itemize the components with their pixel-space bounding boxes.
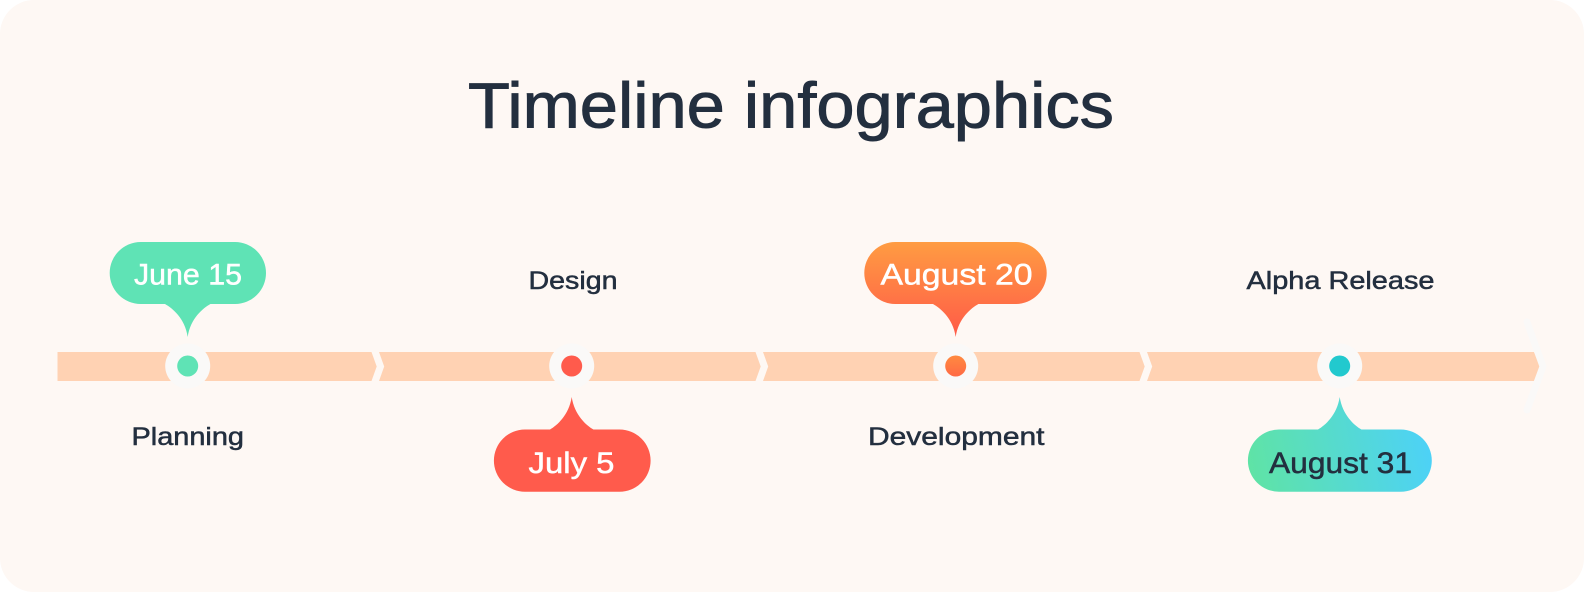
label: Planning: Planning bbox=[132, 423, 244, 451]
label: Development: Development bbox=[868, 423, 1045, 451]
marker bbox=[1317, 344, 1362, 388]
label: Design: Design bbox=[528, 267, 618, 295]
date: August 31: August 31 bbox=[1269, 447, 1412, 480]
bubble: July 5 bbox=[494, 397, 651, 492]
marker bbox=[165, 344, 210, 388]
date: August 20: August 20 bbox=[880, 258, 1032, 292]
segment 3 bbox=[763, 352, 1145, 381]
end chevron bbox=[1527, 322, 1543, 410]
segment 4 bbox=[1147, 352, 1540, 381]
timeline arrow bar bbox=[58, 322, 1543, 410]
title: Timeline infographics bbox=[468, 70, 1114, 142]
segment 2 bbox=[379, 352, 761, 381]
segment 1 bbox=[58, 352, 377, 381]
milestone 4: Alpha Release bbox=[1246, 267, 1434, 492]
milestone 2: Design bbox=[494, 267, 651, 492]
marker bbox=[933, 344, 978, 388]
bubble: August 20 bbox=[864, 242, 1047, 337]
date: July 5: July 5 bbox=[528, 447, 614, 480]
milestone 1: Planning bbox=[110, 242, 266, 451]
bubble: June 15 bbox=[110, 242, 266, 337]
date: June 15: June 15 bbox=[134, 258, 242, 292]
marker bbox=[549, 344, 594, 388]
milestone 3: Development bbox=[864, 242, 1047, 451]
bubble: August 31 bbox=[1248, 397, 1432, 492]
label: Alpha Release: Alpha Release bbox=[1246, 267, 1434, 295]
